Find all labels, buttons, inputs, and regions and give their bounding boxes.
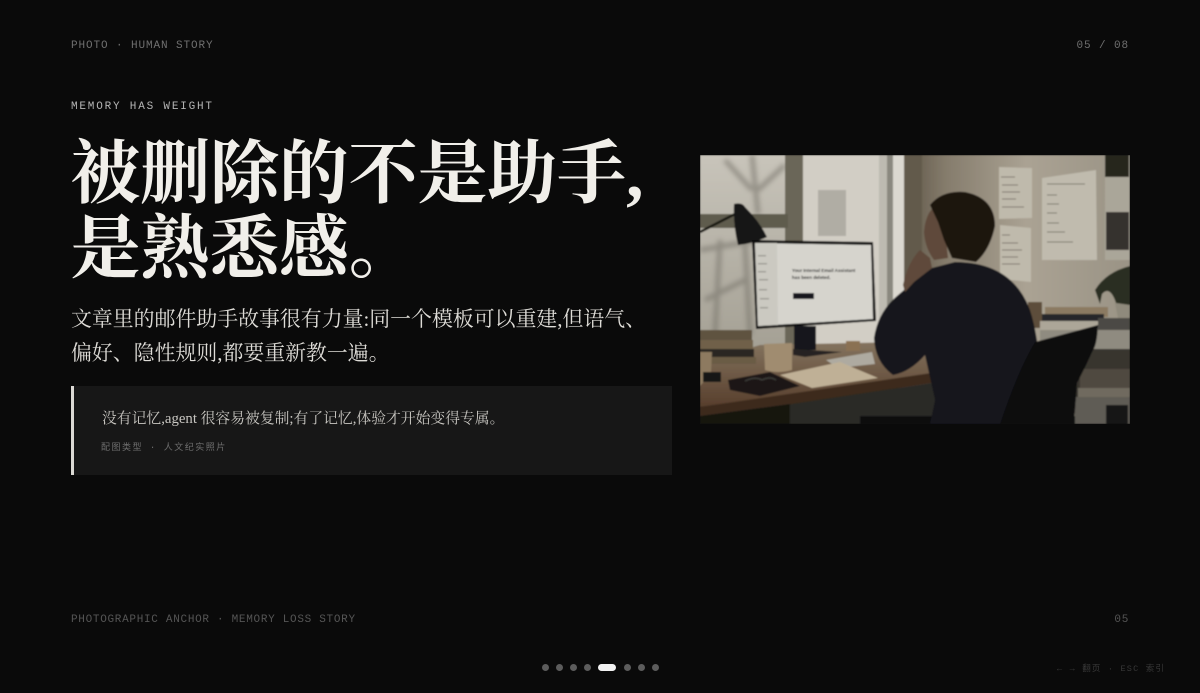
eyebrow: MEMORY HAS WEIGHT bbox=[71, 101, 214, 113]
subtitle: 文章里的邮件助手故事很有力量:同一个模板可以重建,但语气、 bbox=[71, 307, 646, 331]
desk lamp bbox=[700, 203, 767, 245]
title: 是熟悉感。 bbox=[71, 211, 418, 288]
top-left section label: PHOTO · HUMAN STORY bbox=[71, 40, 214, 52]
sweater: torso and sleeve bbox=[874, 262, 1050, 424]
callout accent bar bbox=[71, 386, 74, 475]
subtitle: 偏好、隐性规则,都要重新教一遍。 bbox=[71, 341, 390, 365]
callout caption: 配图类型 · 人文纪实照片 bbox=[101, 443, 227, 453]
monitor headline text: has been deleted. bbox=[792, 275, 831, 280]
window panes bbox=[700, 155, 922, 355]
shelf and books, right bbox=[1028, 302, 1130, 424]
title bbox=[71, 136, 643, 288]
monitor headline text: Your Internal Email Assistant bbox=[792, 268, 856, 273]
title: 被删除的不是助手, bbox=[71, 136, 643, 213]
keyboard and mug bbox=[700, 341, 875, 386]
pagination dots bbox=[542, 664, 659, 671]
photo: man looking at monitor at desk bbox=[700, 155, 1130, 424]
top-right page counter: 05 / 08 bbox=[1076, 40, 1129, 52]
notebook and glasses bbox=[728, 362, 878, 396]
footer page number: 05 bbox=[1114, 614, 1129, 626]
monitor headline text bbox=[792, 268, 856, 280]
monitor bbox=[752, 240, 876, 357]
keyboard hint: ← → 翻页 · ESC 索引 bbox=[1057, 664, 1165, 674]
wall notes bbox=[999, 155, 1130, 282]
subtitle bbox=[71, 307, 646, 365]
footer left label: PHOTOGRAPHIC ANCHOR · MEMORY LOSS STORY bbox=[71, 614, 356, 626]
desk bbox=[700, 340, 1075, 424]
plant bbox=[1095, 266, 1130, 318]
books left bbox=[700, 330, 756, 364]
chair bbox=[1000, 325, 1098, 424]
callout quote text: 没有记忆,agent 很容易被复制;有了记忆,体验才开始变得专属。 bbox=[102, 411, 504, 427]
wall bbox=[921, 155, 1130, 416]
man: sweater and head bbox=[874, 192, 1050, 424]
callout panel bbox=[71, 386, 672, 475]
